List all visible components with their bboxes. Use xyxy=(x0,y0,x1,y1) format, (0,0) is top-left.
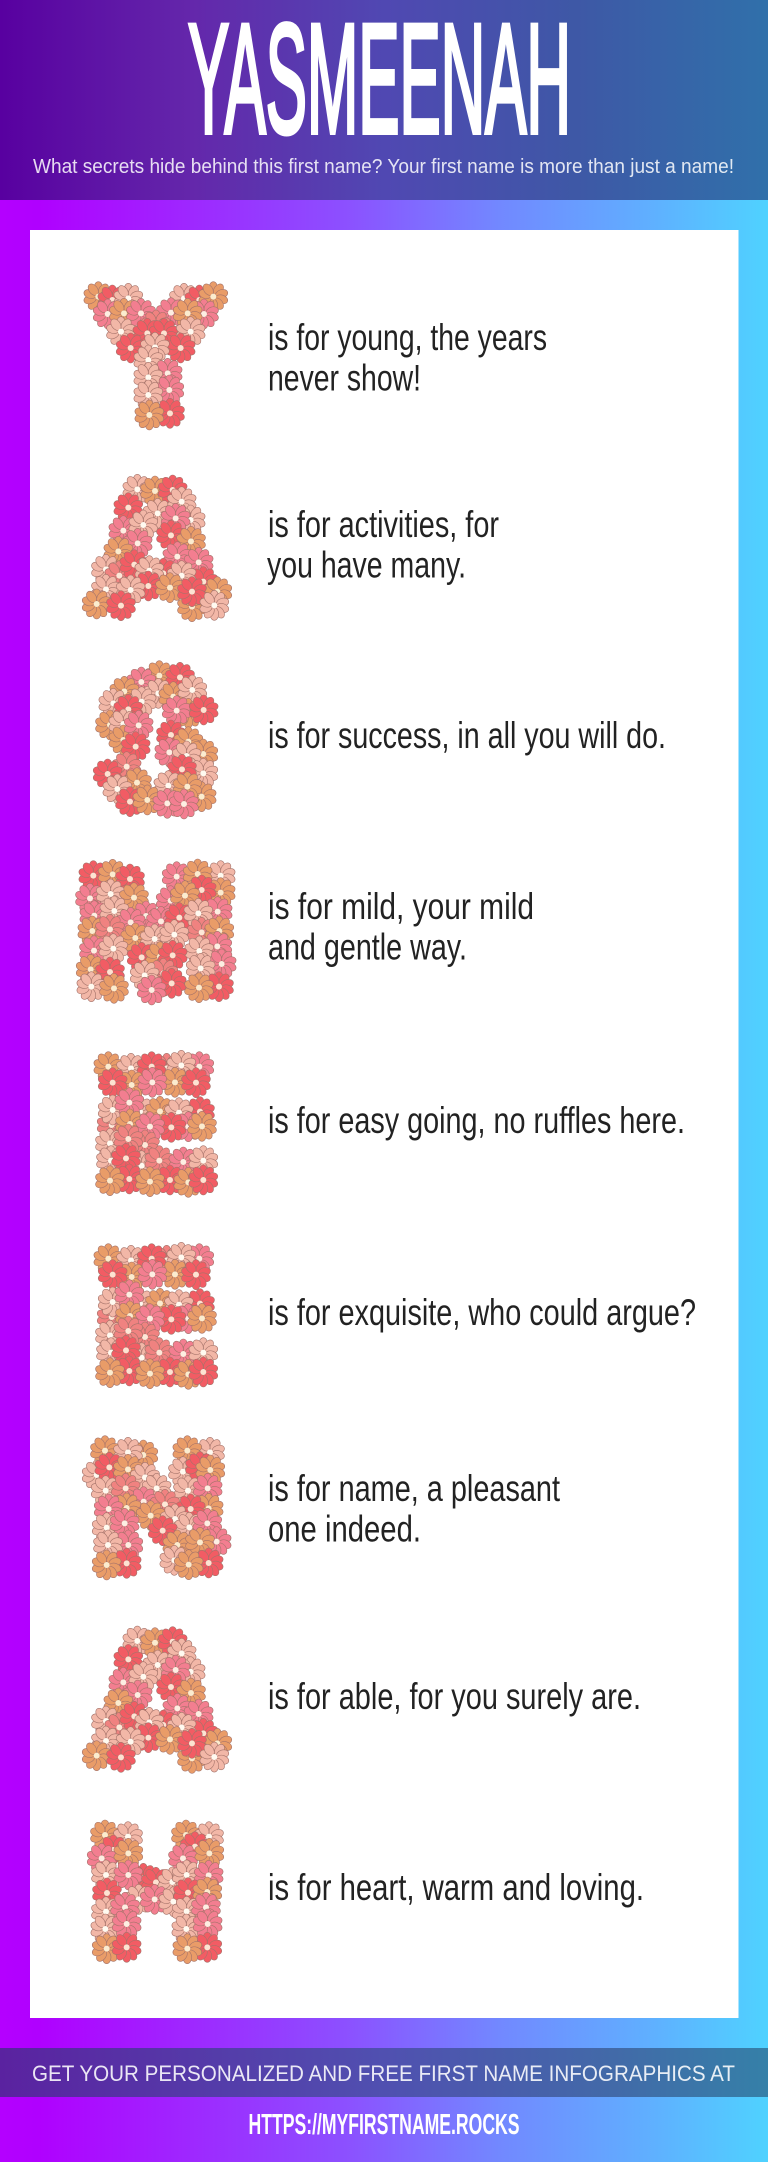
icon: flower letter M xyxy=(74,859,237,1005)
icon: flower letter S xyxy=(92,661,219,819)
icon: flower letter H xyxy=(86,1820,225,1964)
text: N: one indeed. xyxy=(268,1509,421,1550)
text: H: is for heart, warm and loving. xyxy=(268,1867,644,1908)
icon: flower letter A xyxy=(81,1626,233,1773)
icon: flower letter E xyxy=(93,1050,219,1197)
text: A: is for activities, for xyxy=(268,504,499,545)
text: A: is for able, for you surely are. xyxy=(268,1676,641,1717)
white panel xyxy=(30,230,738,2018)
icon: flower letter N xyxy=(81,1436,232,1580)
text: A xyxy=(267,504,499,586)
footer url: HTTPS://MYFIRSTNAME.ROCKS xyxy=(248,2109,520,2141)
icon: flower letter E xyxy=(93,1242,219,1389)
text: A: you have many. xyxy=(267,545,466,586)
icon: flower letter A xyxy=(81,474,233,622)
text: N xyxy=(268,1468,561,1550)
footer call to action: GET YOUR PERSONALIZED AND FREE FIRST NAME INFOGRAPHICS AT xyxy=(32,2061,735,2086)
footer band xyxy=(0,2048,768,2097)
text: M xyxy=(268,886,534,968)
text: M: is for mild, your mild xyxy=(268,886,534,927)
header band xyxy=(0,0,768,200)
subtitle: What secrets hide behind this first name? Your first name is more than just a name! xyxy=(33,156,734,178)
text: Y: is for young, the years xyxy=(268,317,547,358)
text: N: is for name, a pleasant xyxy=(268,1468,561,1509)
text: Y xyxy=(268,317,547,399)
icon: flower letter Y xyxy=(83,282,229,430)
text: S: is for success, in all you will do. xyxy=(268,715,666,756)
text: Y: never show! xyxy=(268,358,421,399)
text: M: and gentle way. xyxy=(268,927,467,968)
